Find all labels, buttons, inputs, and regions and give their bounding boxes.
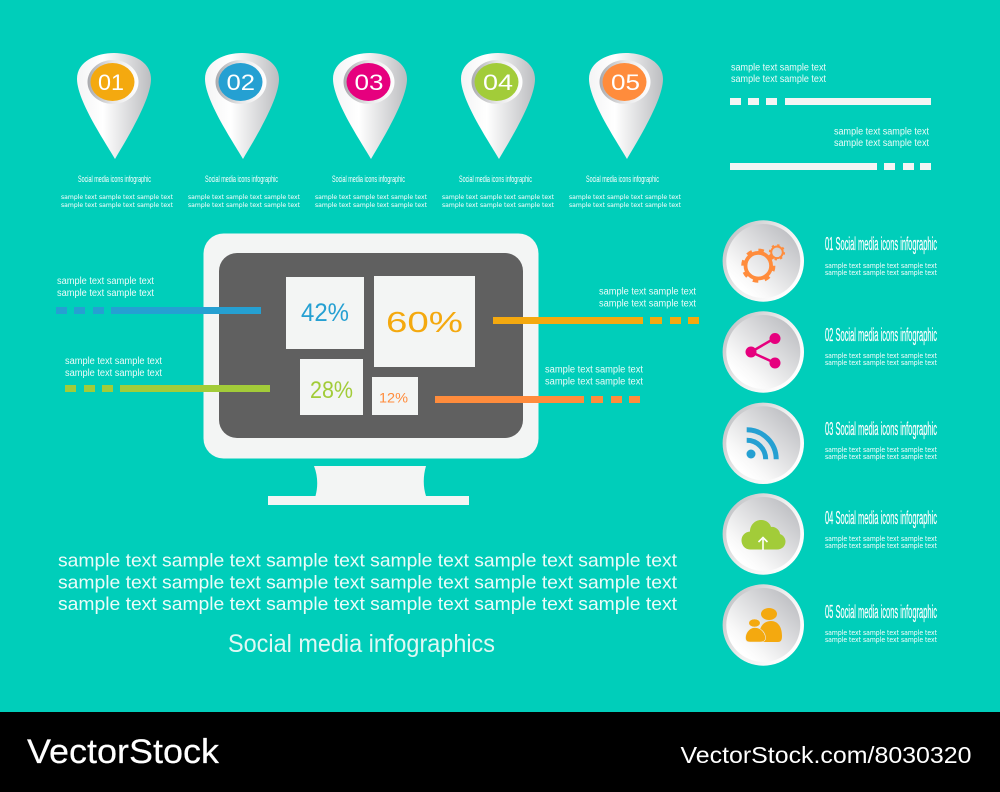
- row 05 people: sample text sample text sample text: [825, 636, 937, 644]
- pin 03: sample text sample text sample text: [315, 193, 427, 201]
- callout: blue bar: sample text sample text: [57, 288, 154, 299]
- callout: lower text and white bar: [730, 126, 931, 170]
- callout: orange bar: sample text sample text: [545, 364, 643, 376]
- callout: upper text and white bar: [730, 62, 931, 105]
- row 05 people: sample text sample text sample text: [825, 629, 937, 637]
- callout: yellow bar: sample text sample text: [599, 298, 696, 310]
- pin 01: 01: [98, 70, 124, 95]
- pin 05: 05: [611, 70, 640, 95]
- row 03 rss: sample text sample text sample text: [825, 446, 937, 454]
- monitor: [204, 234, 538, 505]
- monitor stand: [268, 466, 469, 505]
- pin 02: [188, 53, 300, 209]
- pin 01: sample text sample text sample text: [61, 193, 173, 201]
- callout: upper text and white bar: sample text sample text: [731, 62, 826, 74]
- callout: yellow bar: sample text sample text: [599, 286, 696, 298]
- icon: people: [746, 608, 782, 642]
- stat box 28%: [300, 359, 363, 415]
- callout: upper text and white bar: sample text sample text: [731, 74, 826, 85]
- pin 04: [442, 53, 554, 209]
- callout: green bar: sample text sample text: [65, 368, 162, 379]
- stat box 12%: 12%: [379, 390, 408, 406]
- pin 01: Social media icons infographic: [78, 174, 151, 184]
- pin 02: 02: [226, 70, 255, 95]
- icon: share: [746, 333, 780, 368]
- panel: numbered pins: [61, 53, 681, 209]
- callout: blue bar: sample text sample text: [57, 276, 154, 287]
- stat box 42%: 42%: [301, 299, 349, 327]
- pin 01: [61, 53, 173, 209]
- stat box 28%: 28%: [310, 377, 353, 404]
- pin 03: Social media icons infographic: [332, 174, 405, 184]
- callout: orange bar: sample text sample text: [545, 376, 643, 388]
- panel: social icon list: [723, 220, 937, 666]
- callout: orange bar: [435, 364, 643, 403]
- row 05 people: [723, 584, 937, 666]
- pin 03: [315, 53, 427, 209]
- row 02 share: sample text sample text sample text: [825, 352, 937, 360]
- pin 04: 04: [483, 70, 513, 95]
- stat box 60%: [374, 276, 475, 367]
- footer bar: VectorStock.com/8030320: [680, 742, 972, 768]
- icon: gears: [743, 245, 784, 281]
- row 04 cloud: sample text sample text sample text: [825, 535, 937, 543]
- row 04 cloud: sample text sample text sample text: [825, 542, 937, 550]
- pin 02: sample text sample text sample text: [188, 193, 300, 201]
- callout: yellow bar: [493, 286, 699, 324]
- stat box 60%: 60%: [386, 307, 463, 339]
- icon: cloud upload: [742, 520, 786, 550]
- monitor screen: [219, 253, 523, 438]
- pin 02: Social media icons infographic: [205, 174, 278, 184]
- pin 03: sample text sample text sample text: [315, 201, 427, 209]
- stat box 12%: [372, 377, 418, 415]
- callout: lower text and white bar: sample text sample text: [834, 126, 929, 138]
- main text block: [58, 550, 677, 614]
- monitor frame: [204, 234, 538, 458]
- pin 04: Social media icons infographic: [459, 174, 532, 184]
- row 03 rss: sample text sample text sample text: [825, 453, 937, 461]
- pin 01: sample text sample text sample text: [61, 201, 173, 209]
- row 01 settings: sample text sample text sample text: [825, 269, 937, 277]
- callout: green bar: sample text sample text: [65, 356, 162, 367]
- row 01 settings: sample text sample text sample text: [825, 262, 937, 270]
- main text block: sample text sample text sample text sample text sample text sample text: [58, 594, 677, 614]
- icon: rss: [746, 430, 776, 459]
- callout: green bar: [65, 356, 270, 392]
- title: Social media infographics: [228, 630, 495, 658]
- pin 02: sample text sample text sample text: [188, 201, 300, 209]
- panel: top-right callouts: [730, 62, 931, 170]
- row 04 cloud: [723, 493, 937, 575]
- main text block: sample text sample text sample text sample text sample text sample text: [58, 572, 677, 592]
- row 02 share: [723, 311, 937, 393]
- row 02 share: sample text sample text sample text: [825, 359, 937, 367]
- pin 05: sample text sample text sample text: [569, 201, 681, 209]
- pin 04: sample text sample text sample text: [442, 193, 554, 201]
- main text block: sample text sample text sample text sample text sample text sample text: [58, 550, 677, 570]
- pin 05: Social media icons infographic: [586, 174, 659, 184]
- pin 05: [569, 53, 681, 209]
- callout: lower text and white bar: sample text sample text: [834, 138, 929, 149]
- pin 03: 03: [354, 70, 384, 95]
- row 03 rss: [723, 403, 937, 484]
- row 01 settings: [723, 220, 937, 302]
- pin 05: sample text sample text sample text: [569, 193, 681, 201]
- pin 04: sample text sample text sample text: [442, 201, 554, 209]
- footer bar: [0, 712, 1000, 792]
- callout: blue bar: [56, 276, 261, 314]
- footer bar: VectorStock: [27, 733, 220, 771]
- stat box 42%: [286, 277, 364, 349]
